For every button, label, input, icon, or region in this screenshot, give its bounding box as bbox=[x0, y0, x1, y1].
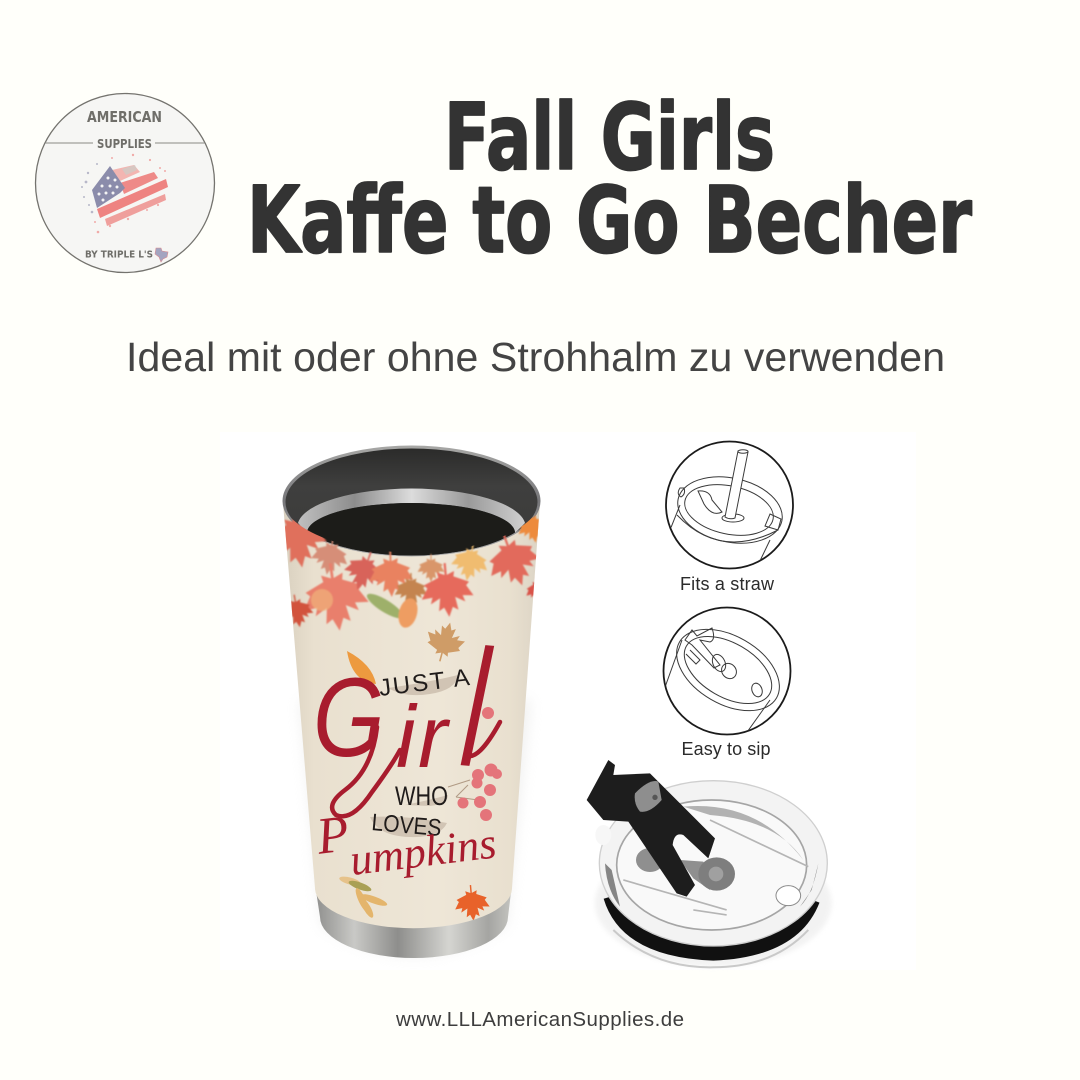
Pumpkins: P bbox=[313, 805, 352, 866]
icon: fits a straw bbox=[666, 442, 793, 594]
black lever bbox=[587, 760, 715, 897]
logo text: Supplies with rule: SUPPLIES bbox=[97, 137, 152, 151]
steel base bbox=[315, 884, 512, 958]
Loves: LOVES bbox=[370, 809, 443, 842]
red berries bbox=[448, 707, 502, 821]
tumbler slogan bbox=[313, 615, 500, 889]
sip hole bbox=[776, 886, 801, 906]
circle bbox=[664, 608, 790, 734]
logo text: American: AMERICAN bbox=[87, 108, 162, 126]
leaf cluster bbox=[284, 515, 539, 631]
lid notch bbox=[595, 825, 611, 845]
grey stopper ring bbox=[636, 848, 735, 891]
text swashes bbox=[370, 675, 458, 837]
lid inner shading bbox=[683, 806, 803, 860]
Girl lettering: l bbox=[456, 615, 497, 803]
paper wrap body bbox=[283, 503, 540, 928]
lid soft shadow bbox=[595, 840, 832, 967]
inner wall bbox=[286, 448, 538, 556]
Pumpkins: umpkins bbox=[347, 818, 499, 885]
icon: easy to sip bbox=[663, 608, 793, 759]
clear lower lip bbox=[613, 930, 808, 967]
label: Fits a straw bbox=[680, 574, 775, 594]
icon: texas outline bbox=[155, 248, 168, 262]
Girl lettering: i bbox=[396, 687, 418, 786]
footer url: www.LLLAmericanSupplies.de bbox=[395, 1008, 684, 1031]
title line 1: Fall Girls bbox=[444, 84, 775, 191]
label: Easy to sip bbox=[682, 739, 770, 759]
logo text: by Triple L's: BY TRIPLE L'S bbox=[85, 250, 153, 260]
Girl lettering bbox=[313, 615, 500, 816]
inner drink opening bbox=[298, 488, 525, 556]
lever grey button bbox=[635, 781, 662, 812]
icon: distressed american flag bbox=[81, 154, 168, 233]
photo background bbox=[220, 432, 916, 970]
product photo panel bbox=[282, 440, 830, 968]
falling tan leaf bbox=[428, 622, 465, 662]
lid inner well bbox=[617, 800, 807, 930]
black gasket bbox=[611, 897, 813, 953]
Girl lettering: r bbox=[418, 687, 451, 786]
clear lid outer bbox=[599, 781, 827, 946]
logo circle bbox=[36, 94, 214, 272]
orange feather leaf bbox=[347, 651, 376, 684]
logo badge bbox=[36, 94, 214, 272]
Who: WHO bbox=[395, 781, 448, 811]
bottom branch leaves bbox=[338, 875, 388, 919]
metal inner band bbox=[298, 489, 525, 533]
dark liquid bbox=[308, 503, 515, 556]
autumn leaves bbox=[263, 503, 553, 922]
tumbler shadow bbox=[300, 700, 530, 955]
Girl lettering: G bbox=[313, 654, 384, 780]
title bbox=[247, 84, 972, 274]
rim bbox=[282, 446, 540, 556]
lid drawing with straw bbox=[671, 449, 783, 560]
tumbler bbox=[282, 446, 540, 958]
lid drawing with open lever bbox=[666, 627, 780, 730]
Just a: JUST A bbox=[377, 664, 471, 702]
G descender and l tail flourishes bbox=[332, 722, 500, 816]
circle bbox=[666, 442, 793, 568]
subtitle: Ideal mit oder ohne Strohhalm zu verwenden bbox=[126, 334, 945, 380]
clear lid photo bbox=[587, 760, 832, 967]
bottom orange maple leaf bbox=[455, 885, 490, 920]
